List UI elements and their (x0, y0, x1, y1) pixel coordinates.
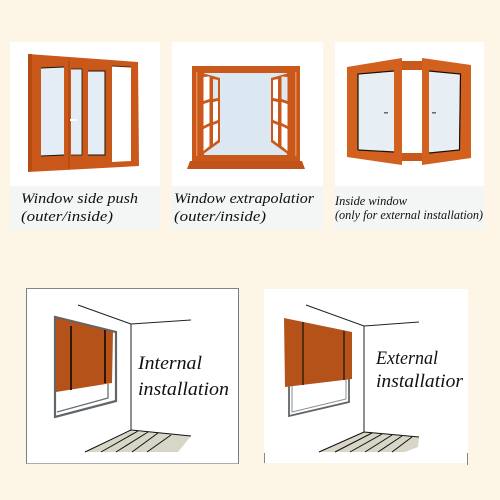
label: internal installation: Internal (137, 354, 202, 374)
label: external installation: installatior (376, 372, 464, 392)
caption: window side push: (outer/inside) (21, 209, 113, 225)
caption: window extrapolation: (outer/inside) (174, 209, 266, 225)
label: internal installation (137, 354, 229, 400)
caption: window extrapolation: Window extrapolatior (174, 191, 314, 207)
caption: window side push: Window side push (21, 191, 138, 207)
floor boards (319, 432, 419, 452)
label: external installation: External (375, 349, 438, 369)
icon: sliding window (28, 54, 139, 172)
caption: inside window (334, 194, 483, 222)
panel: inside window (334, 42, 484, 230)
floor boards (85, 430, 191, 452)
icon: window with blind over the frame (284, 318, 352, 416)
caption: inside window: Inside window (334, 194, 408, 208)
panel: internal installation (26, 288, 239, 464)
panel: window side push (10, 42, 160, 230)
icon: inward opening window (347, 58, 471, 165)
caption: inside window: (only for external installation) (335, 208, 483, 222)
room corner lines (78, 305, 191, 430)
room corner lines (306, 305, 419, 432)
icon: open casement window (187, 66, 305, 169)
label: external installation (375, 349, 464, 392)
panel: external installation (264, 289, 468, 465)
caption: window side push (21, 191, 138, 225)
caption: window extrapolation (174, 191, 314, 225)
icon: window with blind inside the frame (55, 317, 116, 417)
panel: window extrapolation (172, 42, 323, 230)
label: internal installation: installation (138, 380, 229, 400)
